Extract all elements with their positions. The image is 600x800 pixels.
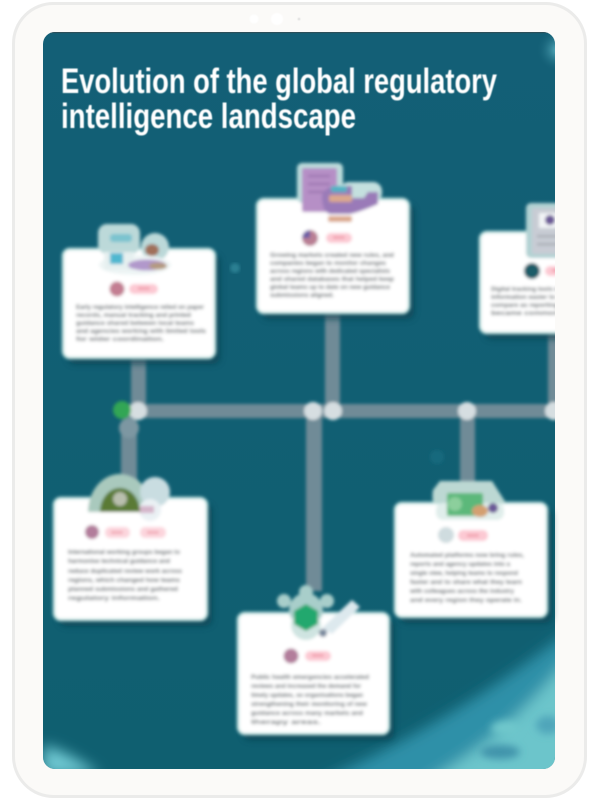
icon: green arch and tablet bbox=[88, 474, 170, 521]
description: strengthening their monitoring of new bbox=[251, 701, 367, 708]
description: Automated platforms now bring rules, bbox=[410, 552, 524, 559]
flag and year bbox=[110, 282, 158, 296]
title bbox=[61, 62, 497, 136]
description: compare as reporting standards bbox=[491, 302, 592, 309]
flag and year: •••• bbox=[467, 533, 479, 540]
icon: banknote and coins bbox=[432, 481, 506, 520]
flag and years bbox=[85, 525, 166, 539]
description: regulatory information. bbox=[68, 595, 160, 602]
description: Digital tracking tools made global bbox=[491, 286, 591, 293]
description bbox=[490, 284, 555, 317]
description: companies began to monitor changes bbox=[270, 260, 387, 267]
card: milestone 2 bbox=[257, 163, 414, 319]
description: reviews and increased the demand for bbox=[251, 683, 362, 690]
flag and year: •••• bbox=[312, 653, 324, 660]
flag and years: •••• bbox=[111, 530, 123, 537]
icon: virus and syringe bbox=[277, 585, 360, 640]
title: intelligence landscape bbox=[61, 97, 356, 136]
description: Growing markets created new rules, and bbox=[270, 252, 394, 259]
flag and year: •••• bbox=[138, 286, 150, 293]
description: Early regulatory intelligence relied on paper bbox=[76, 304, 205, 311]
icon: report document bbox=[524, 200, 555, 260]
description: across regions with dedicated specialists bbox=[270, 268, 391, 275]
description: with colleagues across the industry bbox=[409, 588, 515, 595]
flag and year bbox=[284, 648, 331, 664]
description: harmonise technical guidance and bbox=[68, 558, 170, 565]
description: for wider coordination. bbox=[76, 336, 164, 343]
description: guidance across many markets and bbox=[251, 710, 363, 717]
card: milestone 3 bbox=[476, 200, 555, 344]
description: submissions aligned. bbox=[270, 292, 334, 299]
description: planned submissions and gathered bbox=[68, 586, 178, 593]
description: information easier to collect and bbox=[491, 294, 591, 301]
description: became common. bbox=[491, 310, 561, 317]
description bbox=[251, 674, 369, 726]
description: timely updates, so organisations began bbox=[251, 692, 363, 699]
flag and year: •••• bbox=[333, 235, 345, 242]
description bbox=[409, 552, 524, 604]
description: and every region they operate in. bbox=[410, 597, 522, 604]
card: milestone 4 bbox=[54, 474, 212, 626]
description: guidance shared between local teams bbox=[76, 320, 195, 327]
description bbox=[68, 549, 183, 602]
icon: devices and book bbox=[98, 224, 171, 275]
flag and year bbox=[302, 230, 352, 246]
description: and agencies working with limited tools bbox=[76, 328, 207, 335]
tablet camera dots bbox=[250, 13, 300, 25]
flag and years: •••• bbox=[147, 530, 159, 537]
description: therapy areas. bbox=[251, 719, 321, 726]
description bbox=[270, 252, 394, 299]
timeline bbox=[113, 310, 563, 591]
card: milestone 6 bbox=[395, 481, 552, 623]
description: International working groups began to bbox=[68, 549, 180, 556]
description: reduce duplicated review work across bbox=[68, 568, 183, 575]
card: milestone 1 bbox=[63, 224, 220, 364]
description: global teams up to date on new guidance bbox=[270, 284, 391, 291]
description: records, manual tracking and printed bbox=[76, 312, 191, 319]
description: regions, which changed how teams bbox=[68, 577, 181, 584]
description: single view, helping teams to respond bbox=[410, 570, 518, 577]
description bbox=[76, 304, 207, 343]
description: reports and agency updates into a bbox=[410, 561, 511, 568]
icon: document and whale bbox=[297, 163, 382, 222]
card: milestone 5 bbox=[238, 585, 394, 740]
flag and year: •••• bbox=[552, 268, 564, 275]
flag and year bbox=[438, 527, 488, 543]
description: and shared databases that helped keep bbox=[270, 276, 394, 283]
description: faster and to share what they learn bbox=[410, 579, 522, 586]
description: Public health emergencies accelerated bbox=[251, 674, 369, 681]
